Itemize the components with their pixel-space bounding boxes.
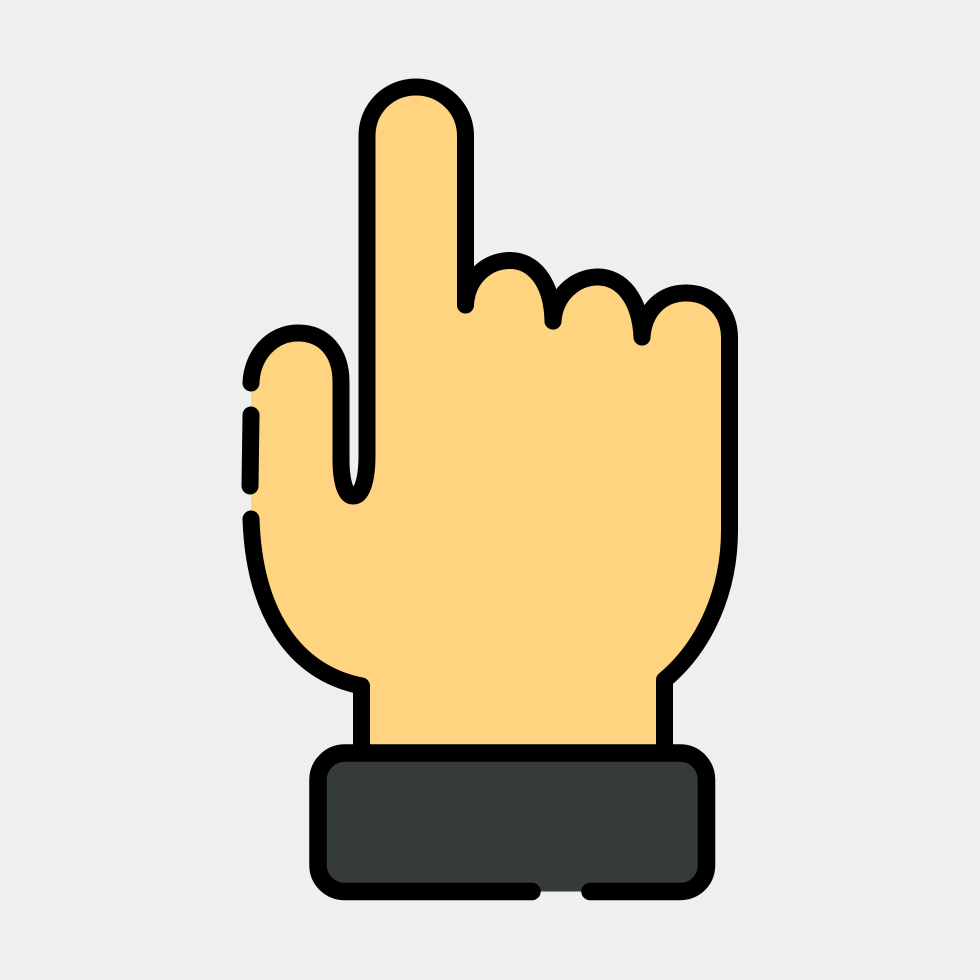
hand fill	[251, 87, 730, 753]
hand outline	[250, 87, 730, 753]
cuff	[318, 753, 706, 892]
